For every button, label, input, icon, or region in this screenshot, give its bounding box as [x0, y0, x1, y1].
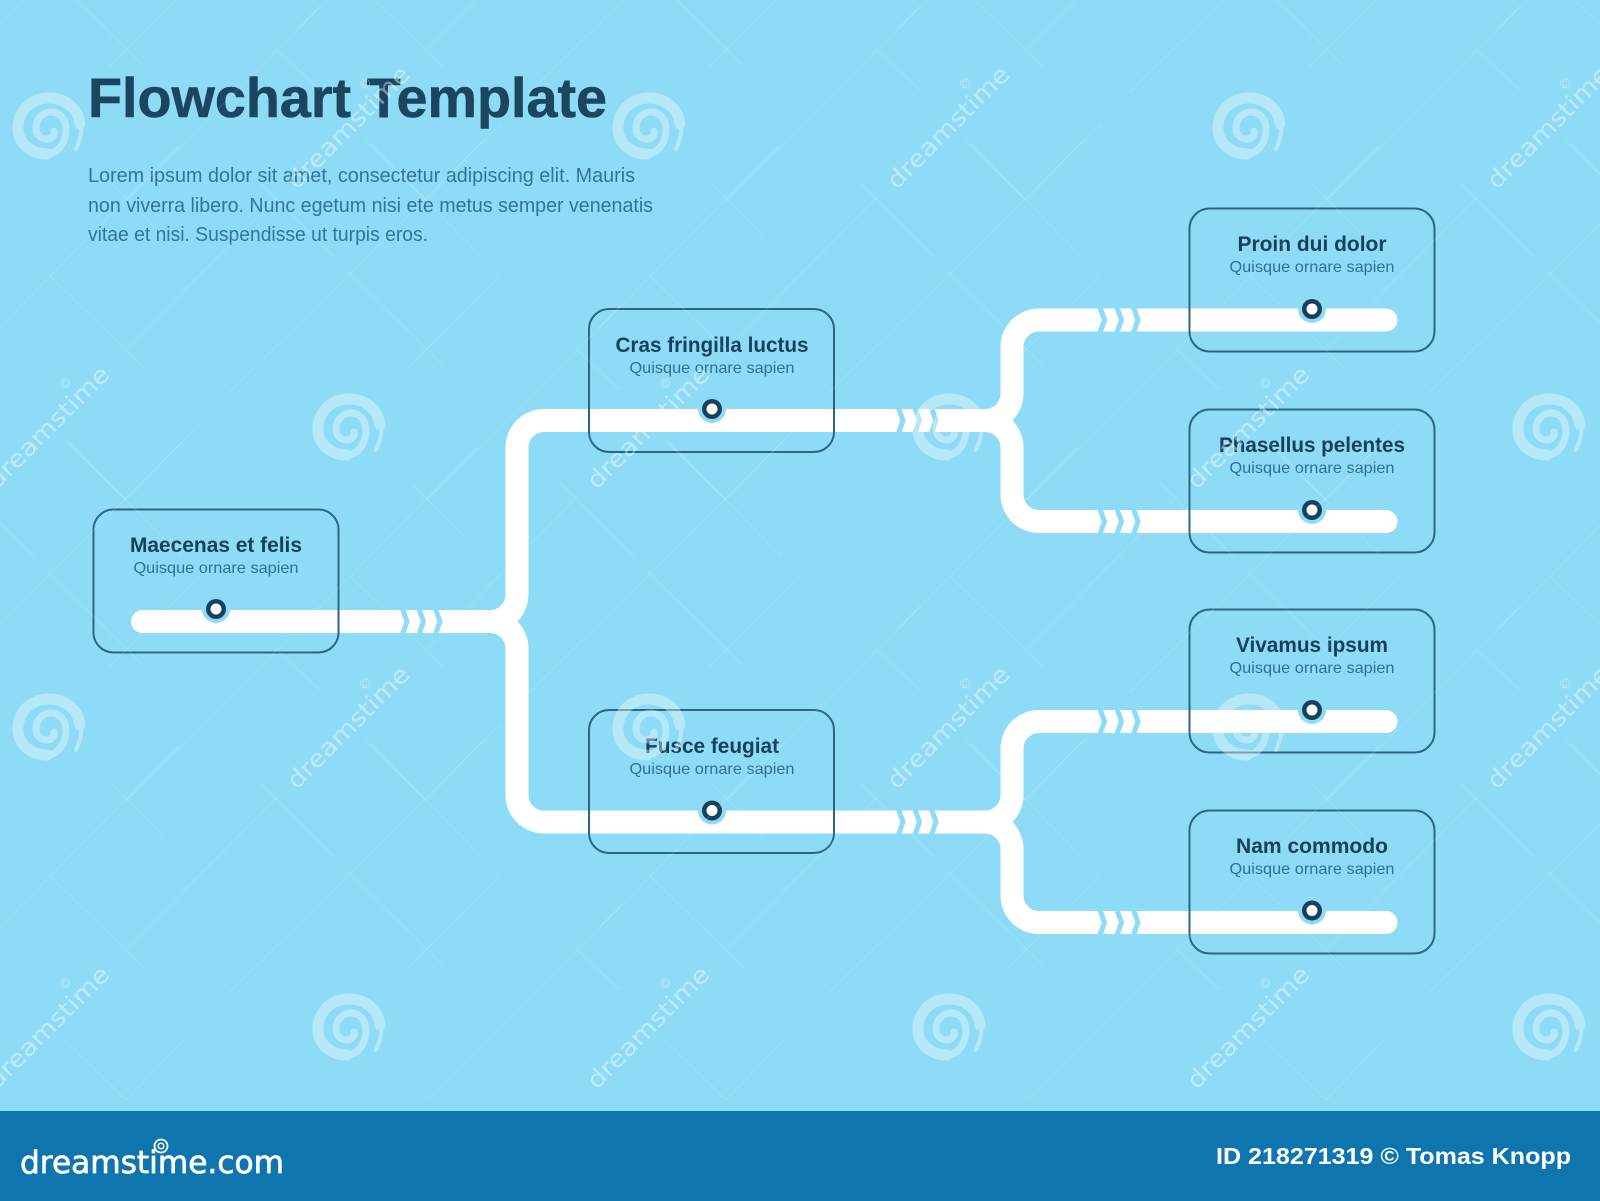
node: Phasellus pelentes	[1190, 410, 1434, 552]
node: Proin dui dolor	[1190, 208, 1434, 352]
intro text block: Lorem ipsum dolor sit amet, consectetur adipiscing elit. Mauris	[88, 165, 635, 187]
node: Proin dui dolor: Quisque ornare sapien	[1230, 259, 1394, 276]
watermark text: dreamstime	[1481, 60, 1600, 195]
node: Maecenas et felis: Quisque ornare sapien	[134, 560, 298, 577]
watermark text: ©	[1560, 75, 1571, 91]
watermark text: dreamstime	[581, 960, 716, 1095]
node: Nam commodo: Quisque ornare sapien	[1230, 861, 1394, 878]
watermark text: ©	[660, 375, 671, 391]
watermark text: ©	[360, 675, 371, 691]
node: Maecenas et felis	[94, 510, 338, 652]
footer credit: ID 218271319 © Tomas Knopp	[1216, 1143, 1571, 1169]
node: Cras fringilla luctus: Cras fringilla luctus	[616, 334, 808, 357]
watermark text: ©	[60, 975, 71, 991]
node: Vivamus ipsum: Quisque ornare sapien	[1230, 660, 1394, 677]
watermark text: dreamstime	[581, 360, 716, 495]
node: Vivamus ipsum: Vivamus ipsum	[1236, 634, 1388, 657]
watermark text: dreamstime	[881, 660, 1016, 795]
node: Fusce feugiat: Quisque ornare sapien	[630, 761, 794, 778]
watermark text: ©	[960, 675, 971, 691]
node: Phasellus pelentes: Quisque ornare sapien	[1230, 460, 1394, 477]
watermark text: ©	[1560, 675, 1571, 691]
node: Phasellus pelentes: Phasellus pelentes	[1219, 434, 1405, 457]
node: Fusce feugiat	[589, 710, 834, 853]
node: Cras fringilla luctus	[589, 309, 834, 452]
intro text block	[88, 165, 653, 246]
watermark text: ©	[1260, 975, 1271, 991]
title: Flowchart Template	[88, 66, 607, 129]
watermark text: ©	[960, 75, 971, 91]
flow connector lines	[142, 308, 1386, 935]
node: Nam commodo	[1190, 810, 1434, 954]
upper middle branch	[700, 308, 1386, 534]
footer bar	[0, 1111, 1600, 1201]
node: Nam commodo: Nam commodo	[1236, 835, 1388, 858]
watermark text: ©	[660, 975, 671, 991]
lower middle branch	[700, 709, 1386, 935]
watermark text: dreamstime	[881, 60, 1016, 195]
node: Vivamus ipsum	[1190, 610, 1434, 752]
watermark text: ©	[60, 375, 71, 391]
watermark spirals	[18, 98, 1581, 1055]
watermark text: ©	[360, 75, 371, 91]
watermark text: ©	[1260, 375, 1271, 391]
watermark text: dreamstime	[281, 660, 416, 795]
intro text block: non viverra libero. Nunc egetum nisi ete metus semper venenatis	[88, 195, 653, 217]
watermark text: dreamstime	[1181, 360, 1316, 495]
node: Fusce feugiat: Fusce feugiat	[645, 735, 779, 758]
watermark text: dreamstime	[1181, 960, 1316, 1095]
watermark text: dreamstime	[281, 60, 416, 195]
watermark text: dreamstime	[1481, 660, 1600, 795]
node: Maecenas et felis: Maecenas et felis	[130, 534, 302, 557]
footer logo: dreamstime.com	[20, 1145, 284, 1181]
root branch	[142, 420, 700, 822]
node: Cras fringilla luctus: Quisque ornare sapien	[630, 360, 794, 377]
intro text block: vitae et nisi. Suspendisse ut turpis eros.	[88, 224, 428, 246]
node: Proin dui dolor: Proin dui dolor	[1238, 233, 1386, 256]
